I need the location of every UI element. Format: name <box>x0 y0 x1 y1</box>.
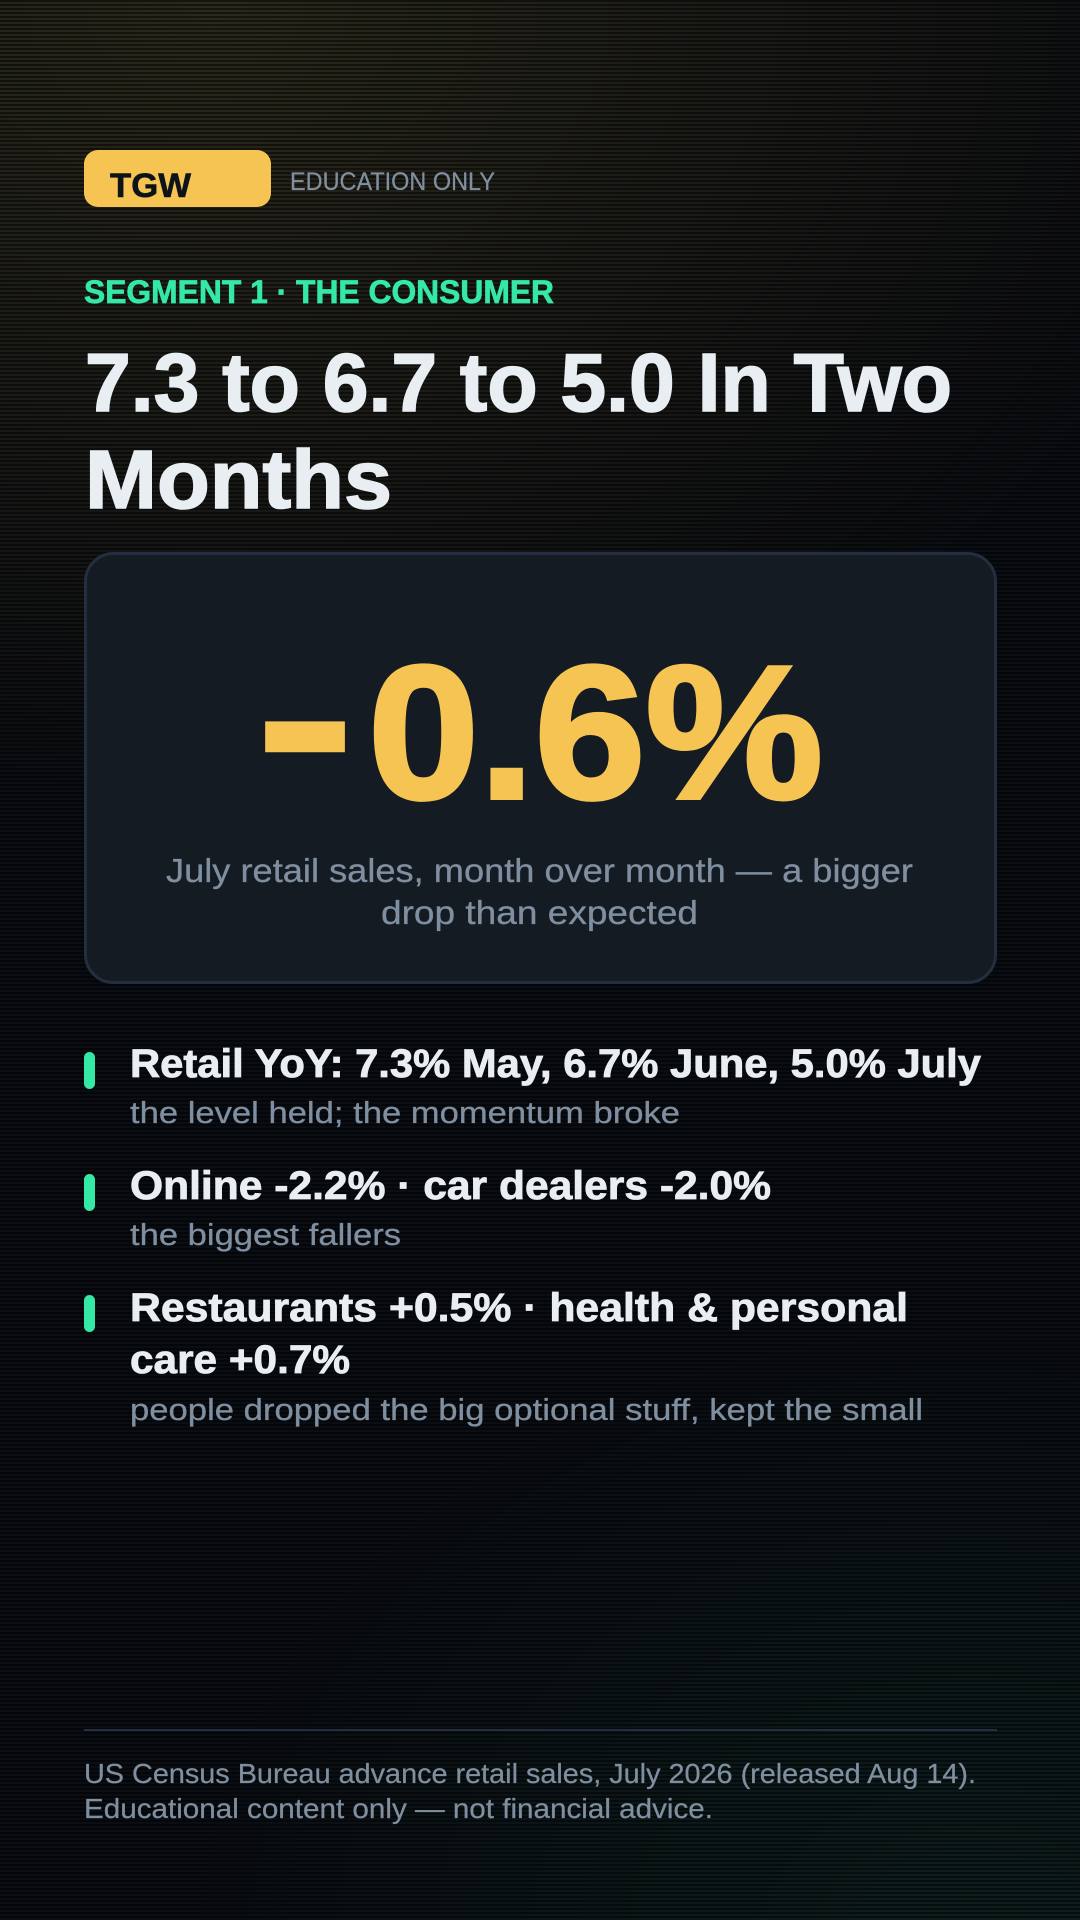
title <box>85 336 952 526</box>
big number: − <box>263 629 347 841</box>
bullet 3: people dropped the big optional stuff, kept the small <box>130 1392 923 1427</box>
bullet 1: the level held; the momentum broke <box>130 1095 680 1130</box>
education only tag: EDUCATION ONLY <box>290 168 495 196</box>
brand badge: TGW <box>110 167 192 205</box>
title: Months <box>85 433 392 526</box>
bullet 3: Restaurants +0.5% · health & personal <box>130 1286 908 1330</box>
bullet 2: the biggest fallers <box>130 1217 401 1252</box>
bullet 2: Online -2.2% · car dealers -2.0% <box>130 1164 771 1208</box>
bullet 3 <box>84 1286 923 1427</box>
bullet 1 <box>84 1042 982 1130</box>
bullet 1: Retail YoY: 7.3% May, 6.7% June, 5.0% July <box>130 1042 982 1086</box>
footer source note <box>84 1758 976 1824</box>
footer source note: Educational content only — not financial advice. <box>84 1793 713 1824</box>
header badge row <box>84 150 495 207</box>
bullet list <box>84 1042 982 1427</box>
brand badge <box>84 150 271 207</box>
big number: 0.6% <box>368 627 823 839</box>
stat caption <box>166 852 913 931</box>
stat caption: July retail sales, month over month — a bigger <box>166 852 913 889</box>
panel: headline stat <box>86 554 996 982</box>
bullet 3: care +0.7% <box>130 1338 350 1382</box>
segment label: SEGMENT 1 · THE CONSUMER <box>84 274 554 310</box>
footer source note: US Census Bureau advance retail sales, July 2026 (released Aug 14). <box>84 1758 976 1789</box>
title: 7.3 to 6.7 to 5.0 In Two <box>85 336 952 429</box>
bullet 2 <box>84 1164 771 1252</box>
stat caption: drop than expected <box>381 894 698 931</box>
